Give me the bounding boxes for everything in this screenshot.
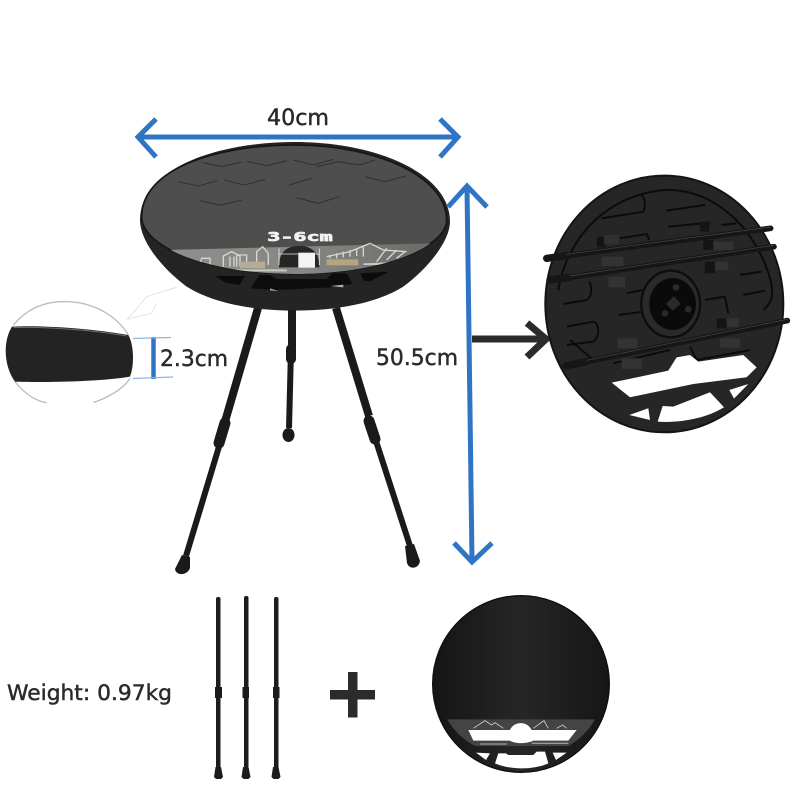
table top	[140, 142, 450, 311]
flat printed band	[447, 719, 595, 746]
label: 40cm: 40cm	[267, 106, 329, 131]
dimension: 40cm width	[138, 106, 458, 157]
middle leg	[289, 308, 292, 428]
dimension: 2.3cm thickness	[133, 337, 228, 379]
folded leg rods	[547, 227, 787, 366]
middle foot	[282, 428, 294, 442]
three detached legs	[214, 596, 280, 779]
thickness bracket	[133, 337, 173, 379]
underside view of table	[545, 176, 787, 432]
table legs	[175, 308, 420, 574]
center hub	[641, 271, 700, 337]
flat disc	[433, 596, 609, 772]
underside brackets	[597, 222, 740, 369]
callout: edge thickness inset	[6, 287, 177, 403]
size label: 3-6cm: 3-6cm	[267, 230, 333, 244]
left leg	[186, 308, 258, 556]
plus sign	[330, 672, 375, 718]
label: 2.3cm: 2.3cm	[160, 347, 228, 372]
flat white center shape	[468, 723, 577, 743]
inset highlight	[13, 327, 127, 336]
table body side	[140, 142, 450, 311]
dimension: 50.5cm height	[376, 186, 492, 562]
flat mountain scenery	[473, 721, 567, 728]
inset magnifier circle	[13, 302, 130, 403]
arrow: height	[448, 186, 492, 562]
printed scenery band	[170, 242, 430, 274]
flat rim cutouts	[476, 752, 567, 768]
label: 50.5cm: 50.5cm	[376, 346, 458, 371]
left foot	[175, 555, 190, 574]
flat lower scenery	[480, 741, 568, 746]
arrow: width	[138, 119, 458, 157]
weight label: Weight: 0.97kg	[7, 681, 172, 705]
white cutouts	[612, 355, 757, 422]
rim cutouts	[215, 272, 389, 290]
underside ribs	[558, 190, 772, 363]
table top, flat view	[433, 596, 609, 772]
underside disc	[545, 176, 783, 432]
callout leader lines	[127, 287, 177, 319]
right foot	[405, 544, 420, 568]
center hole	[279, 246, 319, 268]
leg 2	[242, 596, 250, 779]
arrow: to underside view	[472, 323, 546, 357]
table surface	[142, 145, 447, 274]
right leg	[336, 308, 410, 546]
inset edge close-up	[6, 326, 133, 382]
leg 1	[214, 597, 223, 779]
surface chevron pattern	[178, 159, 406, 205]
leg 3	[272, 597, 280, 779]
